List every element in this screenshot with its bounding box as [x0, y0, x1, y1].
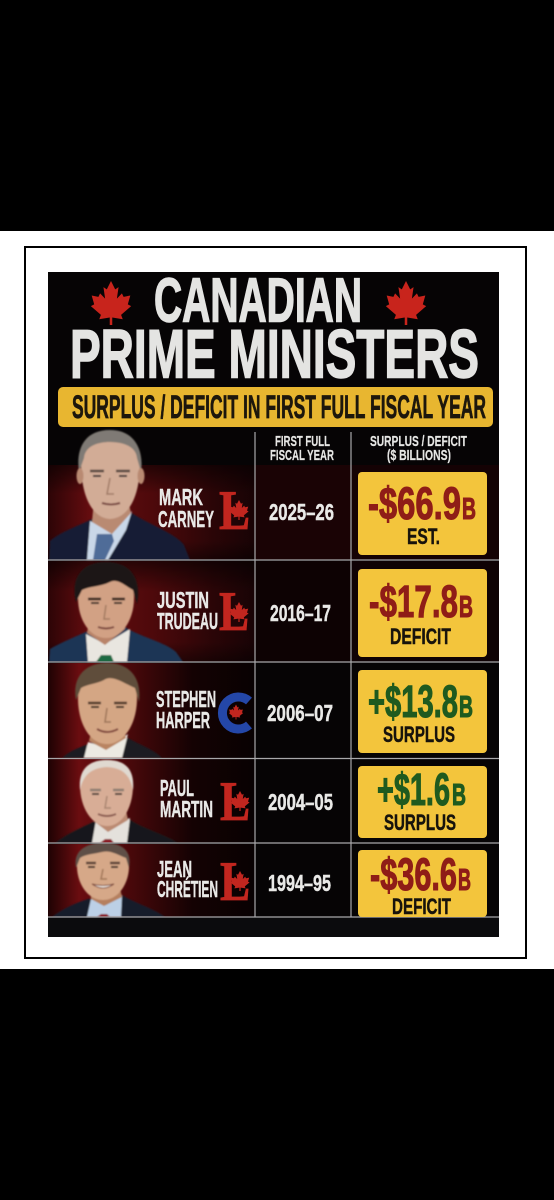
name: JUSTIN — [157, 587, 209, 613]
name: CARNEY — [158, 506, 214, 532]
value card — [358, 849, 487, 919]
column header: surplus or deficit — [370, 434, 467, 464]
name — [157, 856, 218, 902]
poster — [48, 266, 499, 937]
value card: EST. — [407, 524, 440, 549]
name: MARK — [159, 484, 203, 510]
grid lines — [48, 432, 499, 917]
value card: -$17.8 — [369, 576, 458, 627]
portrait: Justin Trudeau — [49, 562, 183, 662]
title — [70, 266, 479, 392]
black bottom band — [0, 969, 554, 1200]
value card: +$1.6 — [377, 764, 450, 815]
fiscal year: 2004–05 — [268, 789, 333, 815]
value card: -$36.6 — [370, 849, 457, 900]
name — [158, 484, 214, 532]
name — [157, 587, 218, 634]
value card: B — [458, 862, 471, 897]
name: JEAN — [157, 856, 192, 882]
value card — [358, 472, 487, 555]
title: CANADIAN — [154, 266, 362, 336]
row: Paul Martin — [160, 764, 487, 838]
name: PAUL — [160, 775, 194, 801]
value card: B — [452, 777, 466, 812]
value card: B — [462, 491, 476, 526]
value card: -$66.9 — [368, 478, 461, 529]
row: Jean Chretien — [157, 849, 487, 919]
portrait: Jean Chretien — [52, 843, 165, 917]
value card — [358, 764, 487, 838]
fiscal year: 2025–26 — [269, 499, 334, 525]
icon: Liberal logo: L — [220, 851, 250, 913]
black top band — [0, 0, 554, 231]
name — [156, 686, 216, 733]
thin black frame — [25, 247, 526, 958]
row: Mark Carney — [158, 472, 487, 555]
name: TRUDEAU — [157, 608, 218, 634]
icon: right maple leaf — [386, 281, 426, 325]
portrait: Stephen Harper — [62, 663, 162, 758]
icon: Conservative logo — [222, 697, 249, 729]
value card: +$13.8 — [368, 676, 458, 727]
value card: B — [459, 689, 473, 724]
portrait: Paul Martin — [55, 760, 178, 843]
icon: Liberal logo: L — [219, 480, 250, 542]
fiscal year: 2016–17 — [270, 600, 331, 626]
value card: DEFICIT — [392, 894, 451, 919]
value card — [358, 670, 487, 753]
white page area — [0, 231, 554, 969]
value card: B — [459, 589, 473, 624]
value card: DEFICIT — [390, 624, 451, 649]
value card — [358, 569, 487, 657]
value card: SURPLUS — [384, 810, 456, 835]
row: Stephen Harper — [156, 670, 487, 753]
name: STEPHEN — [156, 686, 216, 712]
value card: SURPLUS — [383, 722, 455, 747]
name: CHRÉTIEN — [157, 875, 218, 902]
icon: left maple leaf — [91, 281, 131, 325]
column header: surplus or deficit: SURPLUS / DEFICIT — [370, 434, 467, 450]
row backgrounds — [48, 465, 499, 937]
name — [160, 775, 213, 822]
column header: first full fiscal year — [270, 434, 334, 464]
column header: first full fiscal year: FIRST FULL — [275, 434, 330, 450]
icon: Liberal logo: L — [219, 581, 249, 643]
portrait: Mark Carney — [49, 430, 190, 560]
fiscal year: 1994–95 — [268, 870, 331, 896]
icon: Liberal logo: L — [220, 771, 250, 833]
name: MARTIN — [160, 796, 213, 822]
name: HARPER — [156, 707, 210, 733]
column header: surplus or deficit: ($ BILLIONS) — [387, 448, 451, 464]
fiscal year: 2006–07 — [267, 700, 333, 726]
column header: first full fiscal year: FISCAL YEAR — [270, 448, 334, 464]
row: Justin Trudeau — [157, 569, 487, 657]
